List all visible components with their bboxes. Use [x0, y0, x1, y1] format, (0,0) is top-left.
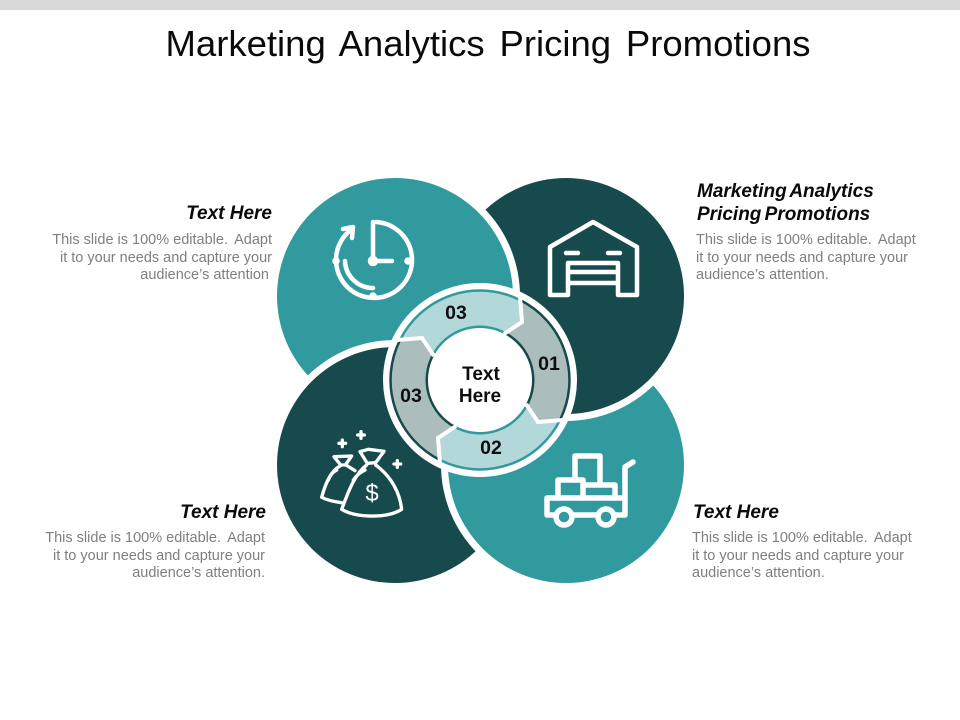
- text block: bottom right: Text Here: [693, 502, 779, 523]
- text block: bottom right: audience’s attention.: [692, 565, 825, 581]
- four overlapping circles: [270, 171, 691, 590]
- text block: bottom left: [45, 502, 266, 581]
- icon: money bags: [322, 432, 402, 516]
- text block: top right: Marketing Analytics: [697, 181, 874, 202]
- circle: top left overlap: [441, 210, 520, 292]
- icon: clock: [334, 222, 412, 298]
- center label: Text: [462, 364, 500, 385]
- center ring: [383, 283, 577, 477]
- text block: top left: audience’s attention: [140, 267, 269, 283]
- segment numbers: [400, 302, 560, 459]
- segment: bottom 02: [438, 405, 560, 469]
- text block: top left: This slide is 100% editable. Adapt: [52, 232, 272, 248]
- center label: [459, 364, 501, 407]
- text block: bottom left: audience’s attention.: [132, 565, 265, 581]
- circle: top right dark: [441, 171, 691, 421]
- text block: bottom left: Text Here: [180, 502, 266, 523]
- text block: top right: This slide is 100% editable. Adapt: [696, 232, 916, 248]
- title: Marketing Analytics Pricing Promotions: [166, 23, 810, 64]
- circle: top left teal: [277, 178, 513, 414]
- text block: top left: it to your needs and capture your: [60, 250, 272, 266]
- text block: top right: audience’s attention.: [696, 267, 829, 283]
- icon: money bags: $: [365, 480, 379, 507]
- text block: bottom left: This slide is 100% editable. Adapt: [45, 530, 265, 546]
- text block: bottom right: This slide is 100% editable. Adapt: [692, 530, 912, 546]
- ring backing: [383, 283, 577, 477]
- text block: top right: it to your needs and capture your: [696, 250, 908, 266]
- text block: top left: Text Here: [186, 203, 272, 224]
- segment numbers: 01: [538, 353, 560, 375]
- text block: top left: [52, 203, 272, 283]
- circle: bottom left dark: [270, 340, 520, 590]
- text block: bottom right: [692, 502, 912, 581]
- segment numbers: 02: [480, 437, 502, 459]
- top bar: [0, 0, 960, 10]
- segment numbers: 03: [400, 385, 422, 407]
- segment: left 03: [391, 338, 455, 460]
- text block: bottom left: it to your needs and capture your: [53, 548, 265, 564]
- segment numbers: 03: [445, 302, 467, 324]
- text block: top right: Pricing Promotions: [697, 204, 870, 225]
- icon: warehouse: [550, 222, 637, 295]
- text block: top right: [696, 181, 916, 283]
- segment: right 01: [505, 300, 569, 422]
- text block: bottom right: it to your needs and capture your: [692, 548, 904, 564]
- circle: bottom right teal: [441, 340, 691, 590]
- segment: top 03: [400, 291, 522, 355]
- icon: cart with boxes: [547, 456, 633, 525]
- center label: Here: [459, 386, 501, 407]
